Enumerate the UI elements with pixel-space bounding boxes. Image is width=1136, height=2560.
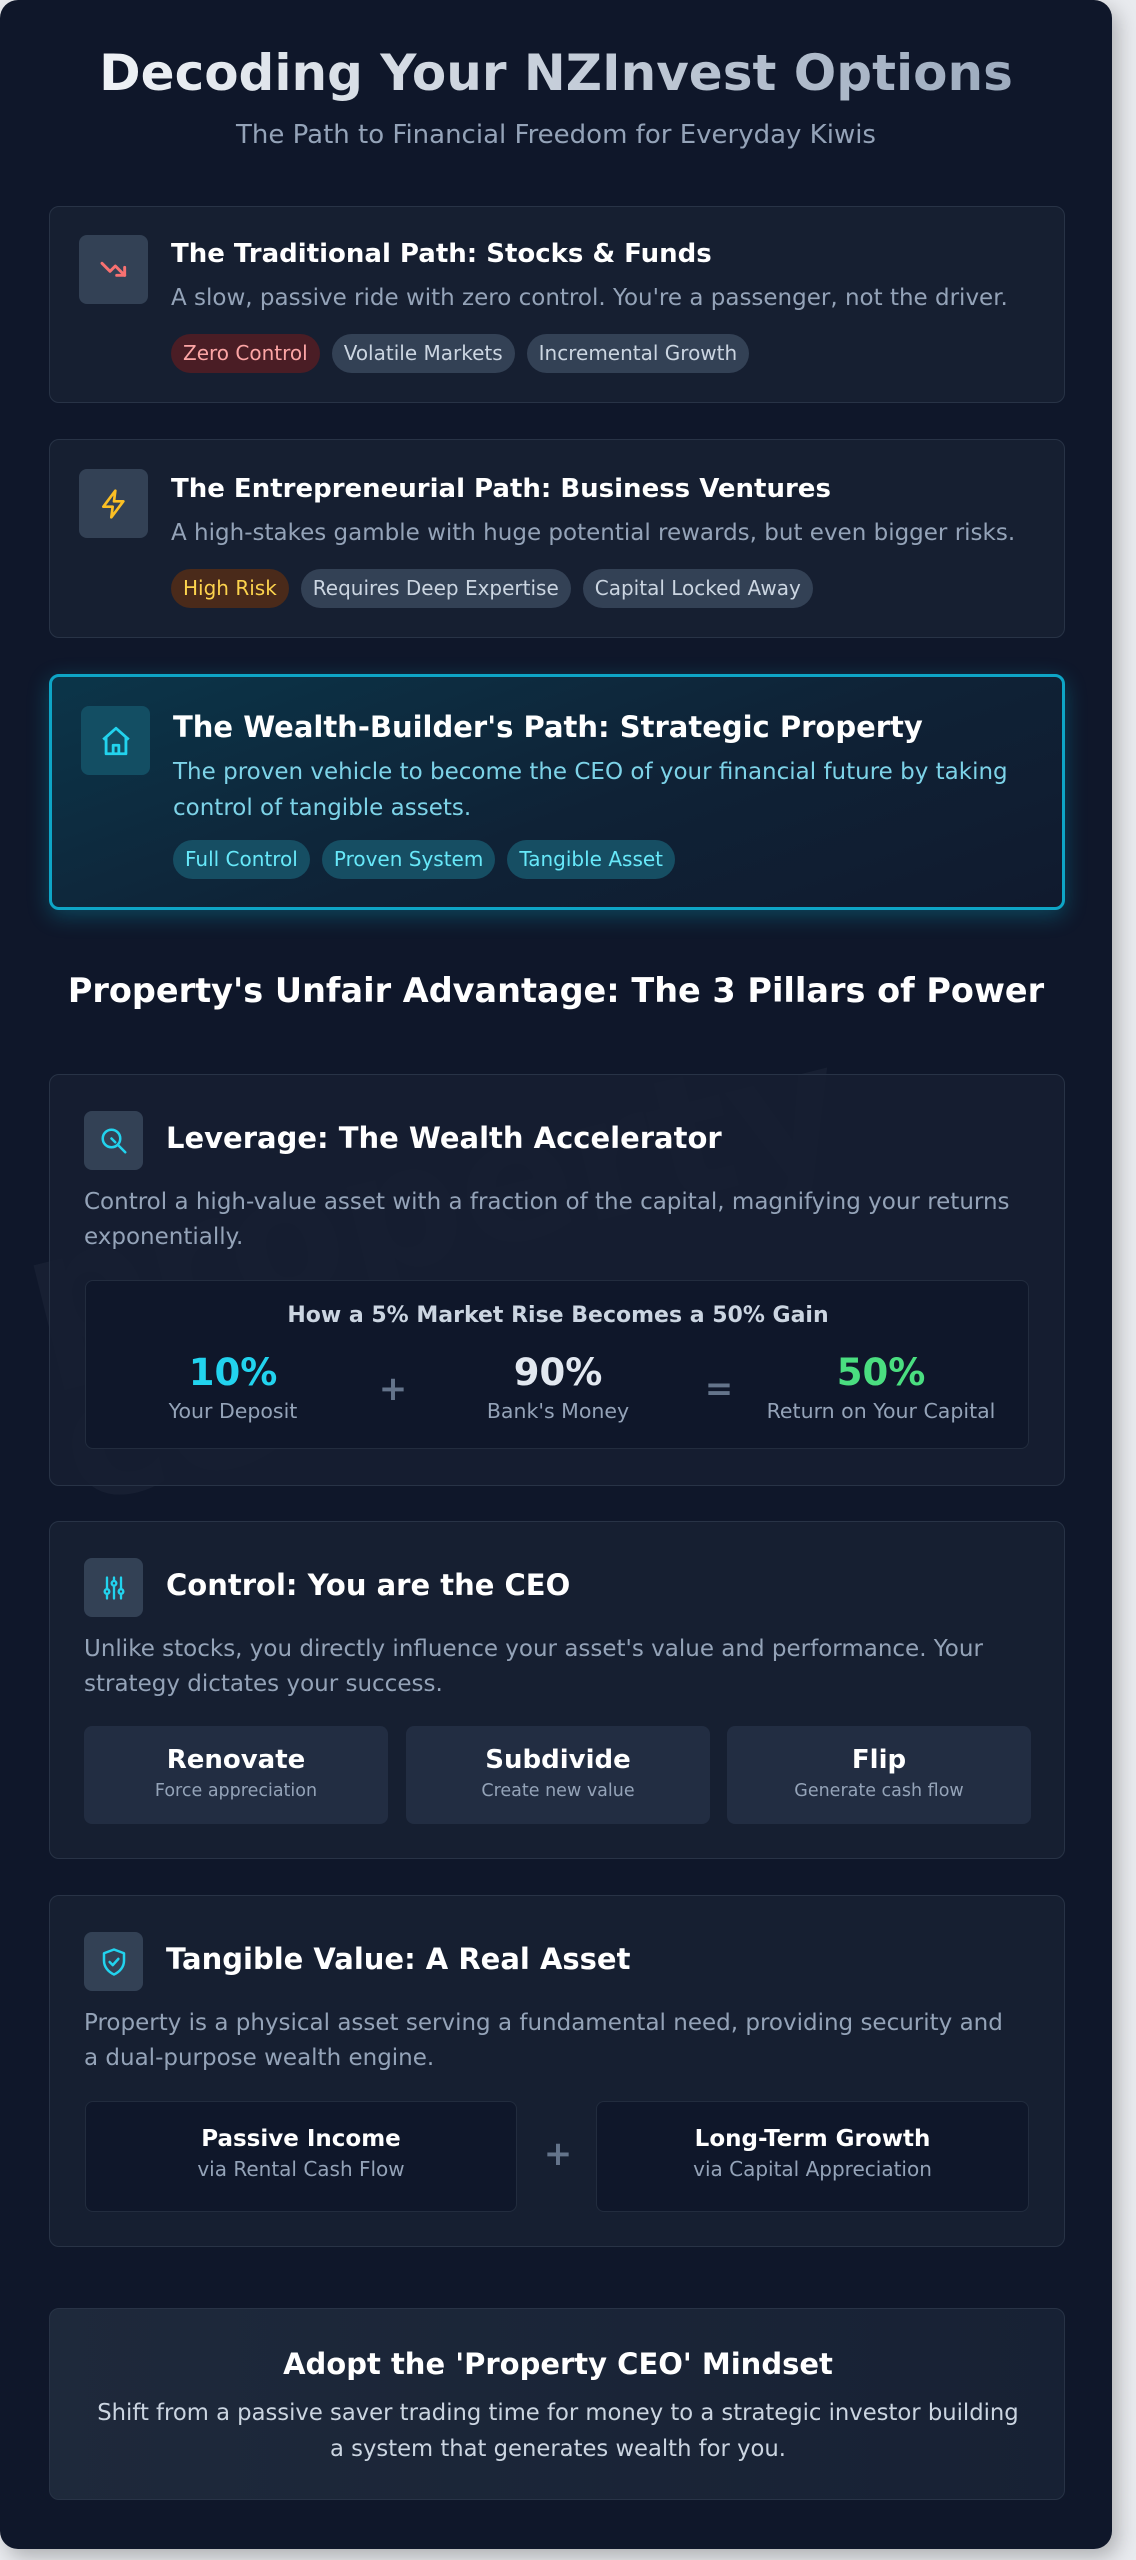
tags: High Risk [183,576,277,600]
icon: sliders [84,1558,143,1617]
heading: The Entrepreneurial Path: Business Ventures [171,474,831,504]
description: The proven vehicle to become the CEO of your financial future by taking control of tangible assets. [173,759,1008,821]
heading: Leverage: The Wealth Accelerator [166,1121,722,1155]
text: Shift from a passive saver trading time for money to a strategic investor building [97,2400,1019,2426]
box title: How a 5% Market Rise Becomes a 50% Gain [287,1303,829,1328]
heading: Adopt the 'Property CEO' Mindset [283,2347,833,2381]
tags: Proven System [334,847,483,871]
benefit: long-term growth: Long-Term Growth [695,2126,930,2152]
option: subdivide: Subdivide [485,1745,631,1775]
icon: trend down [79,235,148,304]
watermark: property [4,1005,863,1399]
description: A slow, passive ride with zero control. You're a passenger, not the driver. [171,285,1008,311]
icon: magnifier [84,1111,143,1170]
stat: return: Return on Your Capital [767,1399,995,1423]
stat: bank: Bank's Money [487,1399,629,1423]
text [97,2400,1019,2462]
stat: return [767,1351,995,1423]
icon: shield [84,1932,143,1991]
option: flip [727,1726,1031,1824]
option: renovate: Renovate [167,1745,305,1775]
tags: Zero Control [183,341,308,365]
tags: Tangible Asset [519,847,663,871]
heading: Tangible Value: A Real Asset [166,1942,630,1976]
heading: The Wealth-Builder's Path: Strategic Property [173,710,923,744]
icon: lightning [79,469,148,538]
plus: + [379,1369,407,1409]
icon: house [81,706,150,775]
stat: deposit: 10% [189,1351,277,1394]
tags [173,840,675,879]
option: subdivide [406,1726,710,1824]
title: Decoding Your NZInvest Options [99,44,1013,102]
benefit: passive income: via Rental Cash Flow [197,2157,405,2181]
leverage calculation box [85,1280,1029,1449]
benefit: long-term growth [596,2101,1029,2212]
tags: Capital Locked Away [595,576,801,600]
tags: Incremental Growth [539,341,737,365]
stat: return: 50% [837,1351,925,1394]
option: subdivide: Create new value [481,1781,635,1801]
panel: tangible value [49,1895,1065,2247]
tags: Full Control [185,847,298,871]
section heading: Property's Unfair Advantage: The 3 Pillars of Power [68,971,1044,1010]
description: Unlike stocks, you directly influence your asset's value and performance. Your strategy dictates your success. [84,1636,983,1697]
stat: bank [487,1351,629,1423]
option: renovate: Force appreciation [155,1781,317,1801]
stat: deposit: Your Deposit [169,1399,297,1423]
heading: The Traditional Path: Stocks & Funds [171,239,712,269]
panel: traditional path [49,206,1065,403]
benefit: passive income [85,2101,517,2212]
panel: leverage [49,1074,1065,1486]
option: renovate [84,1726,388,1824]
option: flip: Generate cash flow [794,1781,964,1801]
text: a system that generates wealth for you. [330,2436,786,2462]
tags: Requires Deep Expertise [313,576,559,600]
benefit: long-term growth: via Capital Appreciation [693,2157,932,2181]
panel: entrepreneurial path [49,439,1065,638]
subtitle: The Path to Financial Freedom for Everyday Kiwis [236,120,876,150]
panel: CEO mindset callout [49,2308,1065,2500]
equals: = [705,1369,733,1409]
description: Property is a physical asset serving a fundamental need, providing security and a dual-purpose wealth engine. [84,2010,1003,2071]
option: flip: Flip [852,1745,906,1775]
heading: Control: You are the CEO [166,1568,570,1602]
plus: + [544,2134,572,2174]
stat: deposit [168,1351,297,1423]
panel: control [49,1521,1065,1859]
watermark [10,1028,893,1521]
watermark: ceo. [40,1256,474,1544]
tags [171,334,749,373]
tags [171,569,813,608]
tags: Volatile Markets [344,341,503,365]
benefit: passive income: Passive Income [201,2126,401,2152]
stat: bank: 90% [514,1351,602,1394]
description: Control a high-value asset with a fraction of the capital, magnifying your returns exponentially. [84,1189,1010,1250]
description: A high-stakes gamble with huge potential rewards, but even bigger risks. [171,520,1015,546]
panel: wealth-builder path [49,674,1065,910]
